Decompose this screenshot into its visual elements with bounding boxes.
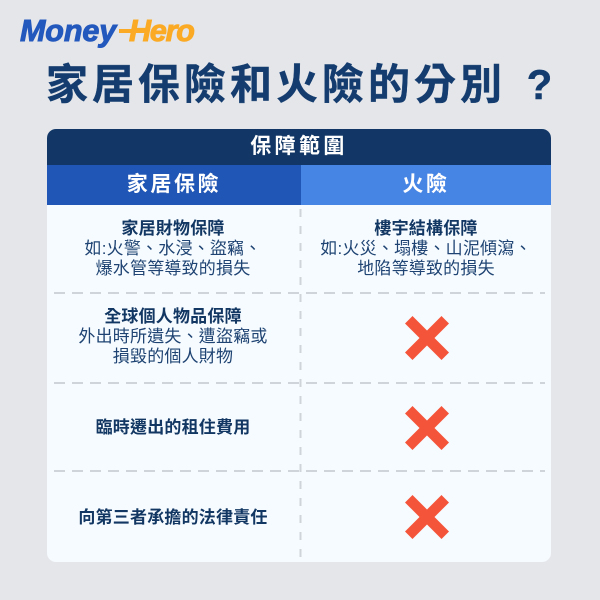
row 1 right: building structure cover (320, 219, 532, 278)
row 1 left: home contents cover: 家居財物保障 (121, 219, 225, 238)
row 2 left: worldwide personal items (78, 307, 268, 366)
heading: coverage scope: 保障範圍 (250, 135, 348, 158)
row 1 right: building structure cover: 如:火災、塌樓、山泥傾瀉、 (320, 239, 532, 258)
title: 家居保險和火險的分別 ? (46, 61, 556, 108)
panel: comparison table (47, 129, 551, 562)
column header: fire insurance (301, 165, 551, 205)
row 1 right: building structure cover: 樓宇結構保障 (374, 219, 478, 238)
logo: MoneyHero (20, 14, 194, 48)
row 2 left: worldwide personal items: 外出時所遺失、遭盜竊或 (78, 327, 268, 346)
row 1 left: home contents cover: 爆水管等導致的損失 (96, 259, 250, 278)
row 1 left: home contents cover: 如:火警、水浸、盜竊、 (85, 239, 261, 258)
icon: cross row 2 (405, 316, 449, 360)
heading: coverage scope (47, 129, 551, 165)
logo: MoneyHero: Money (20, 14, 116, 48)
row 2 left: worldwide personal items: 全球個人物品保障 (104, 307, 242, 326)
column header: fire insurance: 火險 (402, 173, 450, 196)
column header: home insurance: 家居保險 (127, 173, 221, 196)
logo: MoneyHero: Hero (129, 14, 194, 48)
row 1 left: home contents cover (85, 219, 261, 278)
column header: home insurance (47, 165, 301, 205)
row 2 left: worldwide personal items: 損毀的個人財物 (113, 347, 233, 366)
row 3 left: temporary relocation: 臨時遷出的租住費用 (96, 418, 250, 437)
icon: cross row 3 (405, 406, 449, 450)
row 4 left: third party liability: 向第三者承擔的法律責任 (78, 508, 268, 527)
row 1 right: building structure cover: 地陷等導致的損失 (357, 259, 495, 278)
icon: cross row 4 (405, 495, 449, 539)
